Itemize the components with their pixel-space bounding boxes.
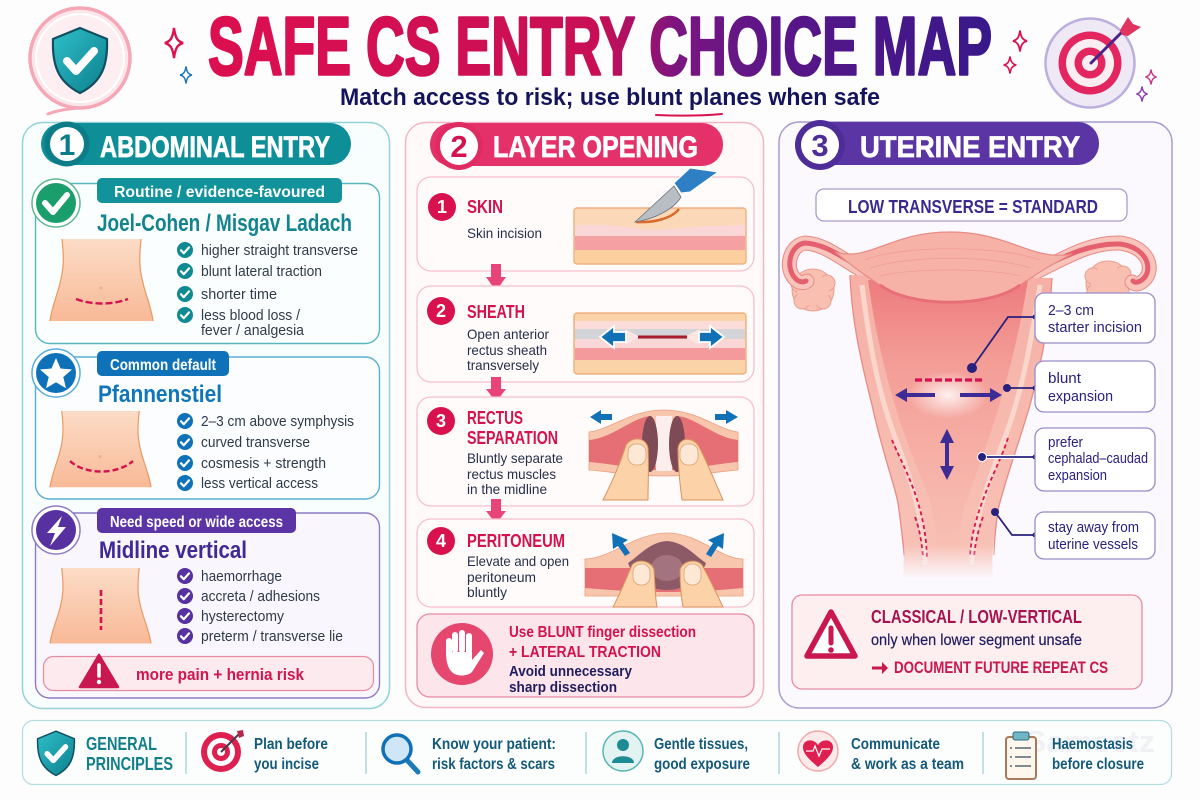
step 4: peritoneum	[417, 519, 754, 607]
item: general principles	[38, 731, 173, 775]
description: skin incision: Skin incision	[467, 225, 542, 241]
panel: layer opening	[406, 122, 764, 708]
description: peritoneum	[467, 553, 569, 600]
description: peritoneum: Elevate and open	[467, 553, 569, 569]
item: communicate	[798, 731, 964, 773]
diagram: skin layers with scalpel	[574, 168, 746, 264]
header: uterine entry: 3	[811, 128, 829, 163]
label: rectus separation: SEPARATION	[467, 428, 558, 448]
card: Pfannenstiel	[32, 349, 380, 499]
list: midline indications: preterm / transverse lie	[201, 629, 343, 645]
arrow: cephalad-caudad	[940, 429, 954, 480]
item: know your patient: risk factors & scars	[432, 756, 555, 773]
icon: safety shield badge	[30, 8, 130, 114]
callout: blunt expansion	[1003, 361, 1155, 412]
list: Joel-Cohen benefits: less blood loss /	[201, 308, 301, 324]
diagram: abdomen straight incision	[50, 239, 153, 321]
label: skin: SKIN	[467, 197, 503, 217]
callout: uterine vessels	[991, 508, 1155, 559]
list: midline indications: haemorrhage	[201, 569, 282, 585]
icon: target with arrow	[1046, 17, 1141, 108]
text: classical: CLASSICAL / LOW-VERTICAL	[871, 607, 1082, 627]
item: haemostasis: Haemostasis	[1052, 736, 1133, 753]
list: Joel-Cohen benefits: shorter time	[201, 287, 277, 303]
incision mark	[915, 378, 982, 382]
uterine vessels	[892, 438, 1008, 557]
item: gentle tissues: Gentle tissues,	[654, 736, 748, 753]
callout: classical warning	[792, 595, 1142, 689]
fallopian tubes	[789, 243, 1149, 284]
cervix fade	[895, 545, 1001, 579]
number 4	[427, 527, 455, 555]
description: sheath	[467, 326, 549, 373]
subtitle underline accent	[656, 114, 722, 116]
label: rectus separation: RECTUS	[467, 408, 523, 428]
diagram: sheath layers with arrows	[574, 313, 746, 374]
item: plan before you incise: Plan before	[254, 736, 328, 753]
item: plan before you incise	[201, 730, 328, 773]
callout: cephalad-caudad	[978, 428, 1155, 491]
tag: common default: Common default	[110, 357, 217, 374]
header: abdominal entry: 1	[59, 129, 75, 162]
arrow: step 2 to 3	[486, 377, 506, 402]
item: haemostasis	[1006, 732, 1144, 779]
list: Joel-Cohen benefits: fever / analgesia	[201, 323, 305, 339]
step 2: sheath	[417, 286, 754, 382]
item: plan before you incise: you incise	[254, 756, 319, 773]
panel: abdominal entry	[22, 122, 390, 708]
item: know your patient: Know your patient:	[432, 736, 556, 753]
callout: starter incision: 2–3 cm	[1048, 303, 1094, 319]
subtitle: Match access to risk; use blunt planes when safe	[340, 84, 880, 111]
callout: pain and hernia risk: more pain + hernia risk	[136, 665, 304, 684]
text: only when unsafe: only when lower segment unsafe	[871, 632, 1082, 649]
number 3: 3	[436, 411, 446, 431]
header: abdominal entry: ABDOMINAL ENTRY	[100, 131, 330, 164]
list: midline indications: hysterectomy	[201, 609, 285, 625]
step 1: skin	[417, 168, 754, 271]
callout: cephalad-caudad: cephalad–caudad	[1048, 451, 1148, 467]
ovary: right	[1085, 261, 1131, 305]
card: Joel-Cohen	[32, 178, 380, 344]
description: rectus: Bluntly separate	[467, 450, 563, 466]
ovary: left	[791, 269, 835, 311]
arrow: step 1 to 2	[486, 264, 506, 291]
tag: need speed: Need speed or wide access	[110, 514, 283, 531]
callout: blunt dissection	[417, 614, 754, 697]
callout: uterine vessels: uterine vessels	[1048, 537, 1138, 553]
banner: low transverse standard: LOW TRANSVERSE = STANDARD	[848, 197, 1098, 217]
heading: Joel-Cohen / Misgav Ladach: Joel-Cohen / Misgav Ladach	[97, 210, 352, 237]
description: rectus	[467, 450, 563, 497]
list: Joel-Cohen benefits	[177, 242, 358, 339]
item: gentle tissues	[603, 731, 750, 773]
callout: uterine vessels: stay away from	[1048, 520, 1139, 536]
uterine side walls	[862, 285, 1040, 565]
callout: starter incision: starter incision	[1048, 320, 1142, 336]
description: sheath: transversely	[467, 357, 539, 373]
callout: pain and hernia risk	[44, 655, 374, 690]
uterine body	[850, 275, 1052, 578]
diagram: abdomen vertical incision	[50, 568, 151, 643]
diagram: fingers elevating peritoneum	[585, 533, 743, 607]
list: Joel-Cohen benefits: higher straight transverse	[201, 243, 358, 259]
label: sheath: SHEATH	[467, 302, 525, 322]
number 1: 1	[437, 197, 447, 217]
list: midline indications: accreta / adhesions	[201, 589, 320, 605]
number 4: 4	[436, 531, 446, 551]
icon: left sparkles	[165, 28, 192, 84]
header: uterine entry	[795, 120, 1099, 170]
icon: right sparkles	[1004, 30, 1157, 102]
header: layer opening	[430, 122, 723, 170]
list: Pfannenstiel features: curved transverse	[201, 435, 310, 451]
description: rectus: in the midline	[467, 481, 547, 497]
description: rectus: rectus muscles	[467, 466, 556, 482]
item: general principles: PRINCIPLES	[86, 754, 173, 774]
description: sheath: Open anterior	[467, 326, 549, 342]
description: peritoneum: peritoneum	[467, 569, 536, 585]
callout: blunt expansion: blunt	[1048, 371, 1081, 387]
list: Pfannenstiel features: 2–3 cm above symphysis	[201, 414, 354, 430]
diagram: fingers separating rectus	[589, 410, 738, 500]
uterine cavity	[868, 280, 1028, 575]
item: haemostasis: before closure	[1052, 756, 1144, 773]
text: document future repeat CS: DOCUMENT FUTURE REPEAT CS	[894, 658, 1108, 677]
diagram: uterus	[789, 232, 1149, 579]
icon: green check	[32, 179, 80, 227]
description: sheath: rectus sheath	[467, 342, 547, 358]
list: Pfannenstiel features: cosmesis + strength	[201, 456, 326, 472]
item: general principles: GENERAL	[86, 734, 157, 754]
text: use blunt dissection: + LATERAL TRACTION	[509, 644, 661, 661]
fundal band	[835, 232, 1072, 302]
arrows: blunt expansion	[895, 388, 1002, 402]
list: Pfannenstiel features	[177, 413, 354, 492]
number 3	[427, 407, 455, 435]
text: use blunt dissection: Use BLUNT finger dissection	[509, 624, 696, 641]
watermark: Sameetz	[1025, 724, 1155, 759]
heading: Pfannenstiel: Pfannenstiel	[98, 381, 222, 408]
icon: stop hand	[431, 623, 493, 685]
panel: general principles	[22, 720, 1172, 784]
text: use blunt dissection: Avoid unnecessary	[509, 663, 633, 680]
description: peritoneum: bluntly	[467, 584, 507, 600]
text: use blunt dissection: sharp dissection	[509, 679, 617, 696]
panel: uterine entry	[779, 120, 1172, 708]
banner: low transverse standard	[816, 189, 1127, 221]
callout: starter incision	[967, 293, 1155, 373]
arrow: step 3 to 4	[486, 499, 506, 524]
icon: warning triangle	[807, 612, 855, 656]
step 3: rectus separation	[417, 397, 754, 506]
callout: blunt expansion: expansion	[1048, 389, 1113, 405]
tag: routine: Routine / evidence-favoured	[114, 184, 325, 201]
tag: need speed	[97, 508, 296, 533]
icon: lightning	[32, 506, 80, 554]
callout: cephalad-caudad: prefer	[1048, 435, 1083, 451]
header: layer opening: LAYER OPENING	[493, 131, 698, 164]
diagram: abdomen curved incision	[50, 411, 151, 487]
number 2: 2	[436, 301, 446, 321]
item: gentle tissues: good exposure	[654, 756, 750, 773]
label: rectus separation	[467, 408, 558, 448]
card: midline vertical	[32, 506, 380, 698]
item: communicate: Communicate	[851, 736, 940, 753]
header: abdominal entry	[41, 122, 351, 166]
tag: routine	[97, 178, 342, 203]
header: layer opening: 2	[450, 129, 468, 164]
item: know your patient	[383, 735, 556, 773]
text: use blunt dissection	[509, 624, 696, 696]
label: peritoneum: PERITONEUM	[467, 531, 565, 551]
number 2	[427, 297, 455, 325]
list: Joel-Cohen benefits: blunt lateral traction	[201, 264, 322, 280]
tag: common default	[97, 351, 229, 376]
number 1	[428, 193, 456, 221]
list: midline indications	[177, 568, 343, 645]
list: Pfannenstiel features: less vertical access	[201, 476, 318, 492]
item: communicate: & work as a team	[851, 756, 964, 773]
header: uterine entry: UTERINE ENTRY	[860, 131, 1080, 164]
heading: Midline vertical: Midline vertical	[99, 537, 247, 564]
callout: cephalad-caudad: expansion	[1048, 468, 1107, 484]
icon: star	[32, 349, 80, 397]
